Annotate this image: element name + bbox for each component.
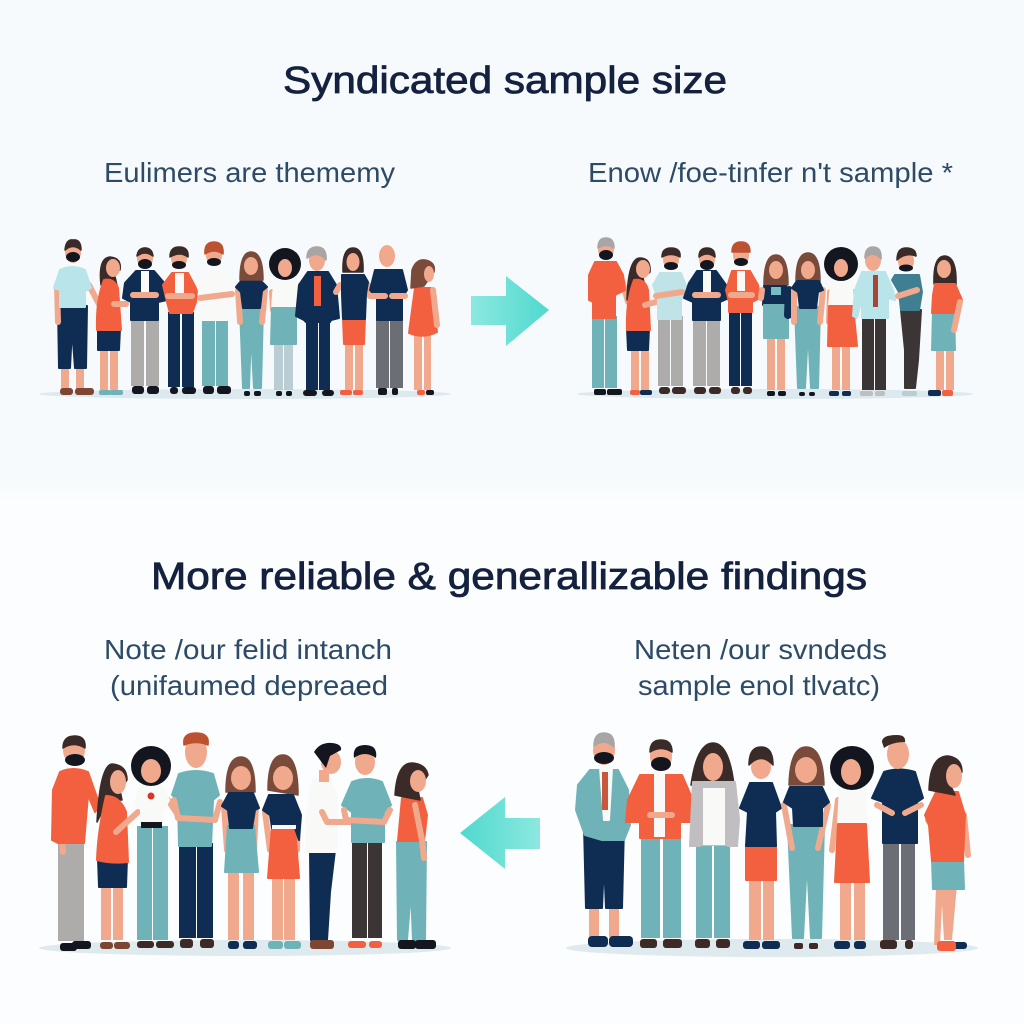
person 5	[726, 242, 760, 394]
person 7	[306, 743, 365, 949]
text: left lower line 2: (unifaumed depreaed	[110, 670, 388, 701]
person 5	[222, 757, 259, 949]
person 2	[97, 764, 138, 949]
person 4	[163, 247, 197, 394]
person 6	[761, 255, 789, 396]
person 6	[830, 746, 874, 949]
person 6	[236, 252, 267, 396]
person 7	[792, 253, 823, 396]
person 3	[690, 743, 739, 948]
person 1	[589, 238, 628, 395]
person 11	[928, 256, 962, 396]
person 9	[853, 247, 895, 396]
person 8	[296, 247, 339, 396]
person 10	[370, 245, 407, 395]
person 9	[395, 763, 436, 949]
person 5	[197, 242, 233, 394]
subtitle: right top: Enow /foe-tinfer n't sample *	[588, 157, 953, 188]
people group: bottom left	[39, 733, 451, 956]
person 9	[336, 248, 370, 395]
arrow: left	[460, 797, 540, 869]
person 2	[627, 258, 670, 395]
person 5	[784, 747, 829, 949]
text: right lower line 1: Neten /our svndeds	[634, 634, 887, 665]
subtitle: left top: Eulimers are thememy	[104, 157, 395, 188]
text: right lower line 2: sample enol tlvatc)	[638, 670, 880, 701]
title: syndicated sample size: Syndicated sample size	[283, 60, 727, 102]
person 7	[269, 248, 301, 396]
person 10	[892, 248, 922, 396]
person 4	[740, 747, 781, 949]
people group: bottom right	[566, 733, 978, 957]
person 8	[925, 756, 968, 951]
person 4	[684, 248, 729, 394]
person 3	[123, 247, 167, 394]
person 3	[653, 248, 687, 394]
person 4	[172, 733, 220, 948]
person 1	[52, 736, 100, 951]
title: reliable findings: More reliable & generallizable findings	[151, 556, 867, 598]
person 2	[626, 740, 695, 948]
person 7	[872, 735, 923, 949]
person 2	[97, 257, 126, 395]
text: left lower line 1: Note /our felid intanch	[104, 634, 392, 665]
person 8	[824, 247, 858, 396]
person 8	[342, 745, 391, 948]
arrow: right	[471, 276, 549, 346]
person 1	[576, 733, 633, 947]
people group: top left	[39, 240, 451, 399]
person 1	[54, 240, 102, 395]
person 3	[131, 746, 176, 948]
person 6	[263, 755, 301, 949]
person 11	[409, 260, 437, 395]
people group: top right	[577, 238, 973, 399]
